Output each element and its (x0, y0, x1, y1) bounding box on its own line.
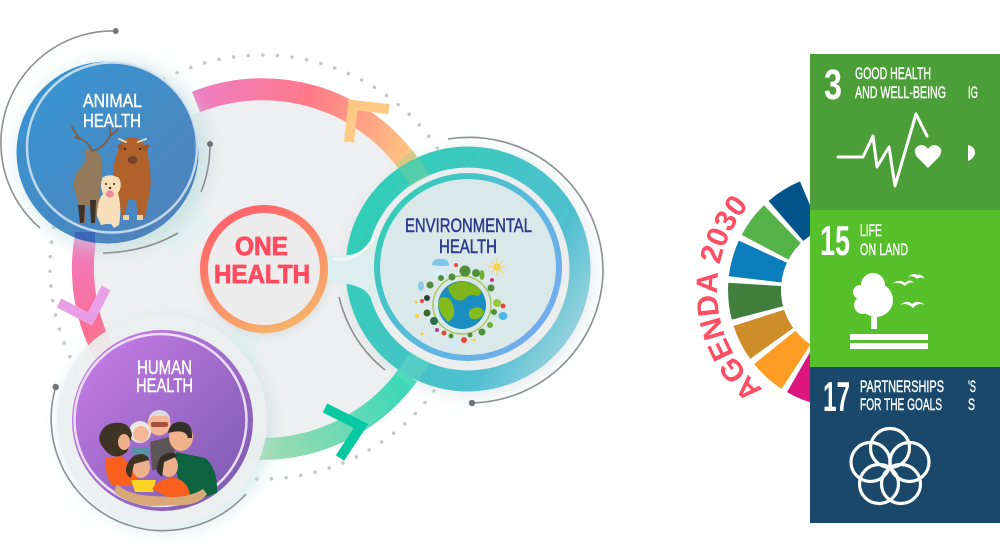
heading: agenda 2030: AGENDA 2030 (696, 196, 762, 398)
panel: animal health (16, 60, 210, 252)
cycle ring (83, 89, 408, 449)
annotation end dots (52, 28, 475, 406)
title: FOR THE GOALS (860, 395, 942, 414)
segment: blue (727, 240, 789, 290)
panel: environmental health (328, 157, 580, 381)
environmental health shadow (346, 148, 594, 396)
central disc (93, 99, 433, 439)
globe (438, 281, 486, 329)
heading: one health: ONE (235, 231, 288, 261)
heading: human health: HUMAN (137, 358, 192, 379)
ring (204, 209, 324, 329)
circle shadow (201, 209, 329, 337)
arc: animal lower (103, 233, 178, 253)
icon: family (99, 410, 217, 506)
arc: animal to environment (196, 89, 408, 163)
arc: environmental inner left (339, 297, 385, 370)
panel: human health (57, 315, 272, 531)
connectors between circles (135, 175, 275, 385)
dotted orbit (50, 55, 474, 479)
icon: tree and birds (850, 273, 928, 349)
clipped text: S (968, 395, 975, 414)
icon: cow (113, 137, 151, 220)
title: GOOD HEALTH (855, 64, 931, 83)
heading: animal health: HEALTH (83, 111, 141, 131)
icon: interlocking rings (851, 428, 929, 504)
clipped text: IG (968, 83, 978, 102)
background (810, 367, 1000, 523)
child right (152, 453, 190, 498)
inner ring (74, 334, 246, 506)
blue disc (16, 62, 198, 244)
arrow: pink chevron (59, 288, 106, 319)
connector to one health (328, 236, 380, 305)
title: AND WELL-BEING (855, 83, 946, 102)
arms (114, 484, 207, 506)
purple disc (72, 330, 253, 511)
segment: magenta (786, 343, 840, 407)
panel: one health (201, 209, 329, 337)
arc: human to environment (245, 375, 408, 449)
wheel: SDG colour segments (727, 180, 840, 407)
sun (488, 258, 506, 276)
halo (60, 319, 272, 531)
inner ring (27, 62, 197, 232)
child left (126, 454, 156, 492)
icon: deer (72, 127, 118, 223)
number: 15 (820, 217, 850, 264)
heading: human health: HEALTH (136, 376, 193, 397)
title: LIFE (860, 221, 882, 240)
overlap with cycle ring (404, 157, 420, 381)
segment: orange (753, 325, 817, 390)
vegetation ring (433, 276, 491, 334)
heading: animal health: ANIMAL (83, 91, 142, 111)
outer teal ring (356, 157, 580, 381)
title: ON LAND (860, 240, 908, 259)
segment: dark blue (768, 180, 828, 245)
card: goal 15 (810, 210, 1000, 367)
clouds (432, 259, 449, 266)
number: 17 (823, 373, 850, 420)
clipped text: 'S (968, 377, 976, 396)
card: goal 17 (810, 367, 1000, 523)
mother (99, 423, 138, 486)
inner ring (377, 176, 559, 358)
number: 3 (824, 61, 842, 109)
arc: around environmental health (448, 137, 603, 403)
segment: ochre (732, 302, 797, 360)
heading: environmental health: ENVIRONMENTAL (405, 216, 532, 237)
grandfather (148, 410, 178, 470)
icon: heartbeat (838, 114, 941, 186)
segment: light green (741, 204, 806, 266)
arrow: green chevron (325, 408, 361, 458)
arrow: orange chevron (349, 105, 389, 142)
arc: around animal health (1, 31, 116, 228)
segment: dark green (727, 278, 784, 320)
background (810, 210, 1000, 367)
annotation arcs (1, 31, 603, 531)
arc: animal to human (83, 235, 108, 360)
heading: environmental health: HEALTH (439, 237, 497, 258)
grandmother (129, 421, 151, 460)
background (810, 54, 1000, 210)
title: PARTNERSHIPS (860, 377, 944, 396)
clipped half circle (968, 145, 975, 161)
icon: globe with nature (414, 258, 508, 348)
circle shadow (18, 60, 210, 252)
arc: around human health (51, 387, 246, 531)
card: goal 3 (810, 54, 1000, 210)
arc: animal inner right (201, 144, 210, 192)
father (168, 422, 217, 497)
icon: dog (97, 175, 121, 228)
heading: one health: HEALTH (214, 259, 310, 289)
